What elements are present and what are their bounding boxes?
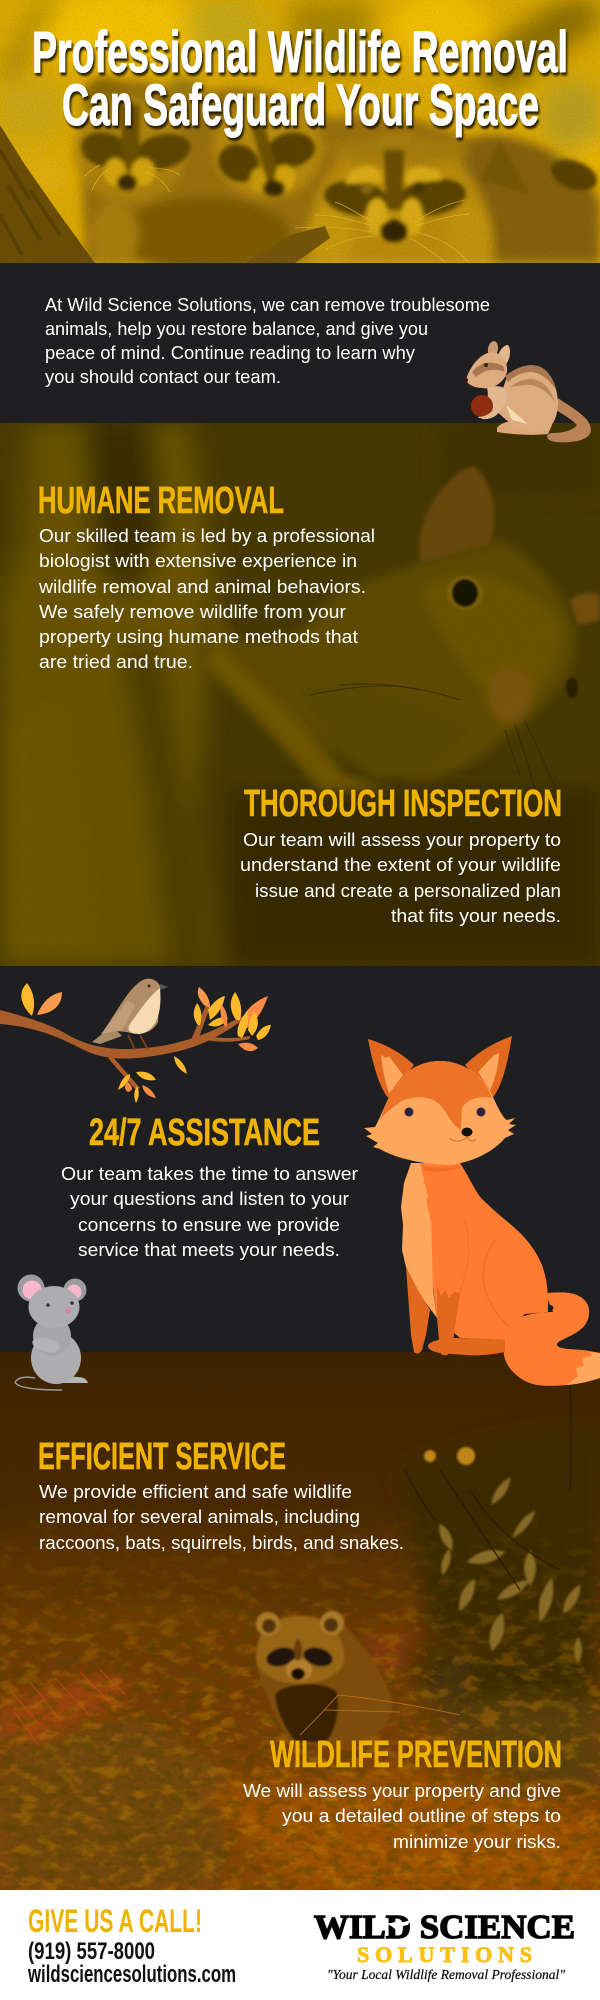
front legs (406, 1267, 430, 1354)
panel: dark assistance band (0, 966, 600, 1352)
body text: understand the extent of your wildlife (240, 854, 561, 875)
intro text: you should contact our team. (45, 366, 281, 387)
body text: wildlife removal and animal behaviors. (38, 576, 366, 597)
body text: Our team will assess your property to (243, 829, 561, 850)
body text (61, 1163, 358, 1260)
panel: footer (0, 1890, 600, 2000)
heading: EFFICIENT SERVICE (38, 1436, 286, 1478)
section: humane removal (38, 480, 375, 672)
body text (240, 829, 561, 926)
body text: Our team takes the time to answer (61, 1163, 358, 1184)
section: thorough inspection (240, 783, 562, 926)
arm and acorn (478, 386, 507, 418)
tail (503, 1292, 600, 1386)
body text: concerns to ensure we provide (78, 1214, 340, 1235)
body text: Our skilled team is led by a professional (39, 525, 375, 546)
body text (38, 525, 375, 672)
title (32, 20, 568, 138)
logo (314, 1909, 575, 1983)
body text: raccoons, bats, squirrels, birds, and snakes. (39, 1532, 404, 1553)
far right raccoon (549, 156, 600, 192)
intro text: animals, help you restore balance, and give you (45, 318, 428, 339)
icon: fox (364, 1036, 600, 1386)
plant leaves (424, 1447, 585, 1663)
panel: header photo of raccoons (0, 0, 600, 273)
logo: "Your Local Wildlife Removal Professional" (327, 1968, 565, 1983)
body text: are tried and true. (39, 651, 193, 672)
feet (497, 421, 552, 435)
heading: HUMANE REMOVAL (38, 480, 284, 522)
front raccoon (322, 177, 390, 219)
body text: that fits your needs. (391, 905, 561, 926)
tree trunk (0, 125, 95, 263)
leaves (21, 983, 271, 1103)
ears (368, 1039, 414, 1098)
panel: squirrel photo section (0, 423, 600, 966)
head (364, 1061, 516, 1165)
body (420, 1163, 548, 1340)
body text: We provide efficient and safe wildlife (39, 1481, 352, 1502)
icon: bat in logo (384, 1920, 410, 1932)
centre raccoon (216, 142, 262, 184)
body text (39, 1481, 404, 1553)
logo: WILD SCIENCE (314, 1909, 575, 1946)
body (495, 365, 558, 432)
intro text (45, 294, 490, 387)
website: wildsciencesolutions.com (27, 1961, 236, 1988)
hind foot (428, 1338, 505, 1355)
tail (547, 398, 591, 442)
icon: branch with autumn leaves (0, 983, 271, 1103)
left raccoon (79, 130, 126, 168)
body text: you a detailed outline of steps to (282, 1805, 561, 1826)
body text: minimize your risks. (393, 1831, 561, 1852)
call to action: GIVE US A CALL! (28, 1903, 202, 1939)
section: efficient service (38, 1436, 404, 1553)
icon: chipmunk (464, 340, 591, 442)
raccoon (256, 1611, 392, 1745)
logo: SOLUTIONS (357, 1942, 532, 1967)
intro text: peace of mind. Continue reading to learn why (45, 342, 416, 363)
body text (243, 1780, 561, 1852)
body text: your questions and listen to your (70, 1188, 349, 1209)
phone: (919) 557-8000 (28, 1938, 155, 1965)
ears (487, 340, 499, 358)
body text: property using humane methods that (39, 626, 358, 647)
body text: biologist with extensive experience in (39, 550, 357, 571)
body text: issue and create a personalized plan (255, 880, 561, 901)
body text: removal for several animals, including (39, 1506, 360, 1527)
panel: raccoon photo section (0, 1352, 600, 1890)
section: 24/7 assistance (61, 1112, 358, 1260)
head (466, 352, 507, 388)
body fold lines (483, 1240, 510, 1327)
section: wildlife prevention (243, 1734, 562, 1852)
body text: We safely remove wildlife from your (39, 601, 346, 622)
chest (401, 1163, 437, 1318)
icon: bird on branch (92, 979, 168, 1050)
body text: We will assess your property and give (243, 1780, 561, 1801)
intro text: At Wild Science Solutions, we can remove troublesome (45, 294, 490, 315)
heading: 24/7 ASSISTANCE (89, 1112, 320, 1154)
body text: service that meets your needs. (78, 1239, 340, 1260)
panel: intro band (0, 263, 600, 423)
icon: mouse (15, 1274, 88, 1390)
